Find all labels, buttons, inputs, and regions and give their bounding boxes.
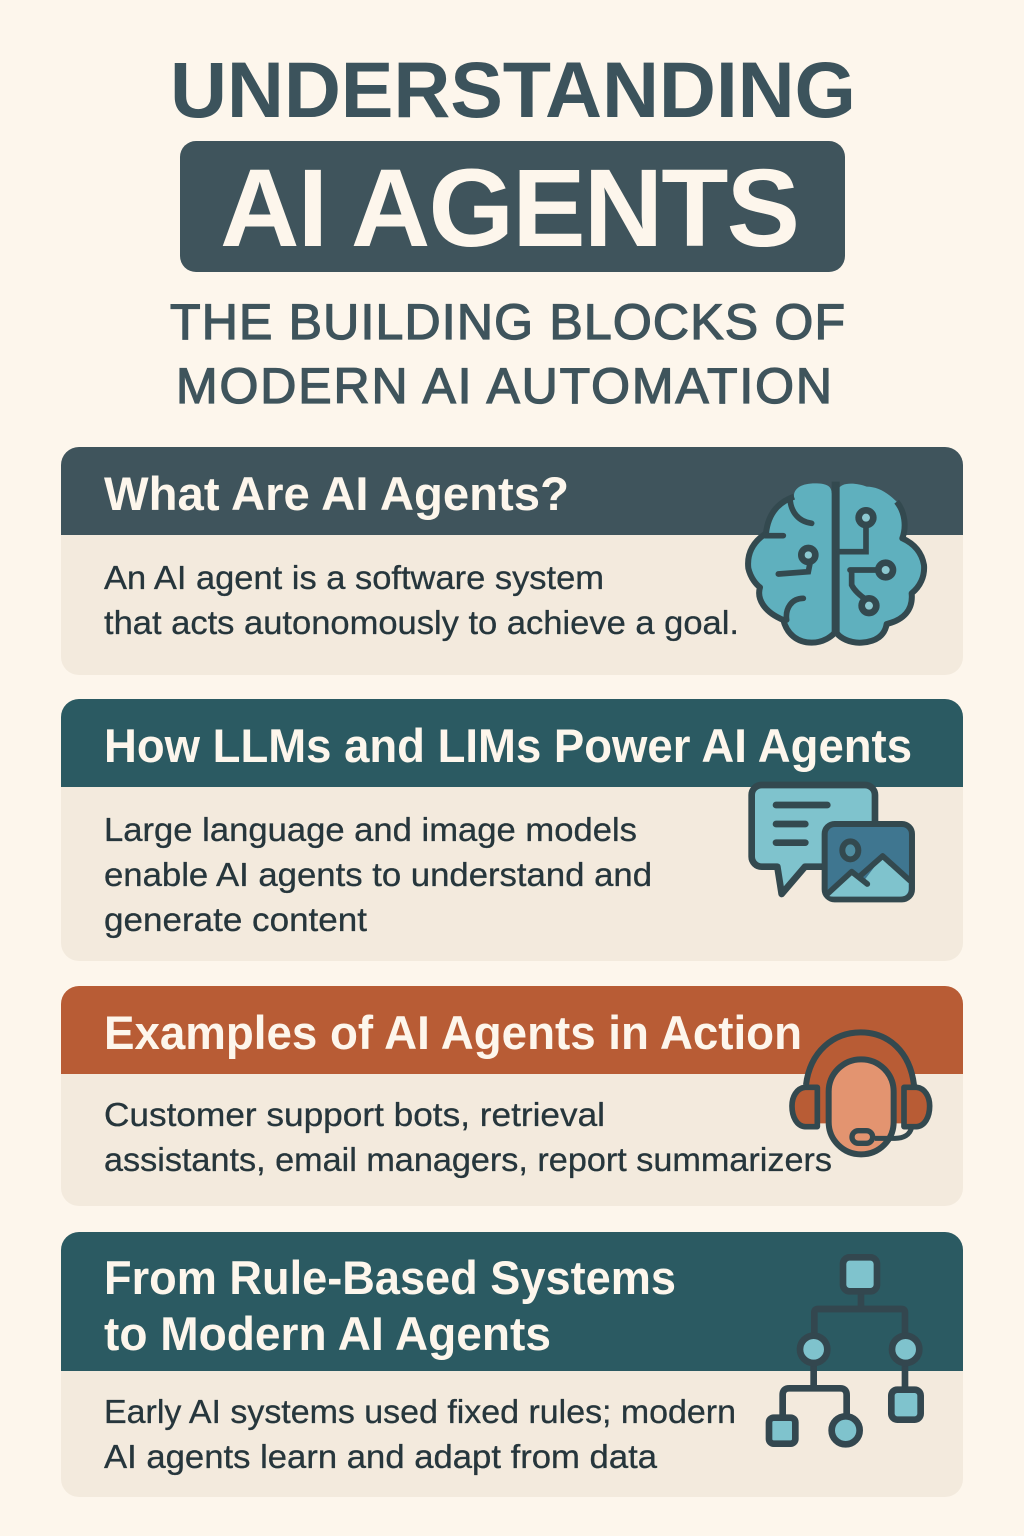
text block: definition: An AI agent is a software system <box>104 560 604 597</box>
heading: examples: Examples of AI Agents in Action <box>104 1006 802 1059</box>
text block: examples list: Customer support bots, retrieval <box>104 1097 605 1134</box>
text block: models: Large language and image models <box>104 812 637 849</box>
heading: rule-based to modern: to Modern AI Agents <box>104 1307 551 1360</box>
text block: evolution <box>104 1394 736 1476</box>
heading: rule-based to modern: From Rule-Based Systems <box>104 1251 676 1304</box>
heading: rule-based to modern <box>104 1251 676 1360</box>
heading: LLMs and LIMs: How LLMs and LIMs Power AI Agents <box>104 719 912 772</box>
subtitle: MODERN AI AUTOMATION <box>176 358 832 414</box>
title: Understanding: UNDERSTANDING <box>170 45 856 134</box>
panel: how LLMs and LIMs power AI agents <box>61 699 963 961</box>
text block: models: enable AI agents to understand and <box>104 857 652 894</box>
icon: chat bubble and image <box>752 785 912 899</box>
panel: what are AI agents <box>61 447 963 675</box>
icon: headset <box>792 1032 930 1154</box>
text block: models: generate content <box>104 902 368 939</box>
icon: brain <box>748 482 924 643</box>
title banner: AI Agents: AI AGENTS <box>220 147 800 270</box>
text block: evolution: AI agents learn and adapt from data <box>104 1439 657 1476</box>
text block: examples list <box>104 1097 832 1179</box>
text block: definition <box>104 560 739 642</box>
icon: decision tree <box>769 1257 921 1444</box>
subtitle <box>170 294 845 414</box>
heading: what are AI agents: What Are AI Agents? <box>104 467 569 520</box>
subtitle: THE BUILDING BLOCKS OF <box>170 294 845 350</box>
text block: models <box>104 812 652 939</box>
panel: from rule-based systems to modern AI agents <box>61 1232 963 1497</box>
text block: definition: that acts autonomously to achieve a goal. <box>104 605 739 642</box>
panel: examples of AI agents in action <box>61 986 963 1206</box>
text block: examples list: assistants, email managers, report summarizers <box>104 1142 832 1179</box>
text block: evolution: Early AI systems used fixed rules; modern <box>104 1394 736 1431</box>
